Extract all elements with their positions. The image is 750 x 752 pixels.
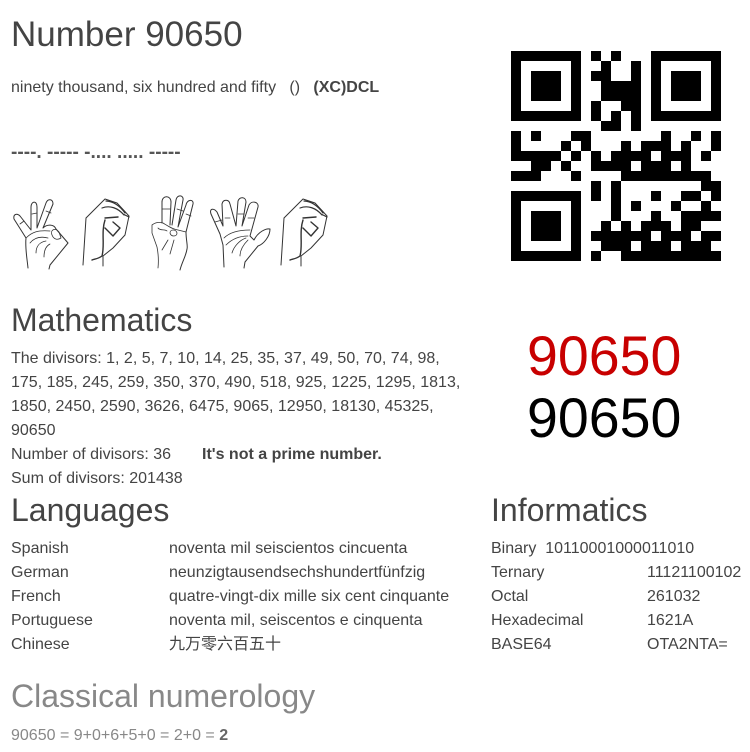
languages table: noventa mil seiscientos cincuenta: [169, 540, 407, 557]
divisors list: 1850, 2450, 2590, 3626, 6475, 9065, 12950, 18130, 45325,: [11, 398, 434, 415]
text: It's not a prime number.: [202, 446, 382, 463]
languages table: neunzigtausendsechshundertfünfzig: [169, 564, 425, 581]
number of divisors and prime status: Number of divisors: 36: [11, 446, 171, 463]
hand sign: 0: [83, 199, 129, 266]
number image black: 90650: [527, 387, 681, 449]
informatics table: 11121100102: [647, 564, 741, 581]
informatics table: Octal: [491, 588, 528, 605]
informatics table: 261032: [647, 588, 700, 605]
hand sign: 6: [152, 196, 193, 270]
sum of divisors: Sum of divisors: 201438: [11, 470, 183, 487]
languages table: noventa mil, seiscentos e cinquenta: [169, 612, 422, 629]
heading: Informatics: Informatics: [491, 492, 647, 528]
QR code: [511, 51, 721, 261]
divisors list: 90650: [11, 422, 56, 439]
sign language hands: [13, 195, 328, 270]
number in words and roman numeral: ninety thousand, six hundred and fifty () (XC)DCL: [11, 79, 379, 96]
languages table: quatre-vingt-dix mille six cent cinquante: [169, 588, 449, 605]
informatics table: OTA2NTA=: [647, 636, 728, 653]
languages table: German: [11, 564, 69, 581]
informatics table: Ternary: [491, 564, 544, 581]
informatics table: [491, 540, 741, 653]
divisors list: The divisors: 1, 2, 5, 7, 10, 14, 25, 35, 37, 49, 50, 70, 74, 98,: [11, 350, 440, 367]
heading: Languages: Languages: [11, 492, 169, 528]
hand sign: 0: [281, 199, 327, 266]
numerology calculation: 90650 = 9+0+6+5+0 = 2+0 = 2: [11, 727, 228, 744]
informatics table: Binary 10110001000011010: [491, 540, 694, 557]
hand sign: 5: [211, 198, 270, 268]
hand sign: 9: [14, 200, 68, 269]
languages table: French: [11, 588, 61, 605]
divisors list: 175, 185, 245, 259, 350, 370, 490, 518, 925, 1225, 1295, 1813,: [11, 374, 460, 391]
heading: Classical numerology: Classical numerology: [11, 678, 315, 714]
number image red: 90650: [527, 325, 681, 387]
morse code: ----. ----- -.... ..... -----: [11, 142, 181, 163]
languages table: Chinese: [11, 636, 70, 653]
informatics table: 1621A: [647, 612, 693, 629]
informatics table: BASE64: [491, 636, 551, 653]
languages table: 九万零六百五十: [169, 636, 281, 653]
number of divisors and prime status: [11, 446, 382, 463]
languages table: [11, 540, 449, 653]
heading: Mathematics: Mathematics: [11, 302, 192, 338]
languages table: Spanish: [11, 540, 69, 557]
informatics table: Hexadecimal: [491, 612, 583, 629]
languages table: Portuguese: [11, 612, 93, 629]
divisors list: [11, 350, 460, 439]
title: Number 90650: [11, 15, 243, 54]
